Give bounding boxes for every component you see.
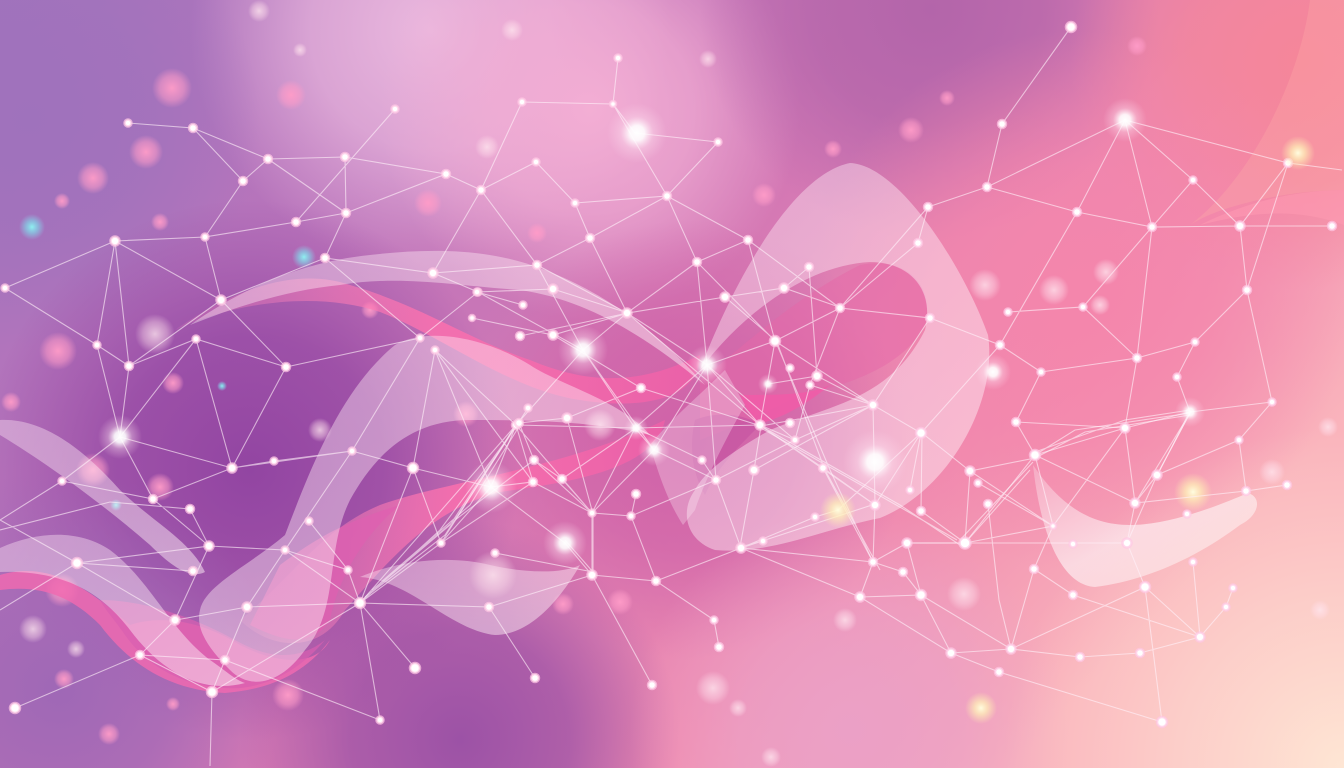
icon: cyan sparkle lights	[19, 214, 316, 511]
ribbon: upper sweep	[190, 251, 705, 385]
strand bundles	[360, 340, 1190, 603]
ribbon: connecting strip	[650, 370, 745, 525]
ribbon: right tail	[1033, 465, 1257, 587]
ribbon: hot pink underlayers	[0, 190, 1344, 693]
ribbon: large right loop	[687, 163, 989, 551]
ribbon: lower centre wave	[360, 560, 580, 635]
ribbon: bottom left waves	[0, 420, 245, 686]
bright glow stars	[98, 98, 1315, 599]
ribbon: centre left loop	[199, 336, 650, 682]
